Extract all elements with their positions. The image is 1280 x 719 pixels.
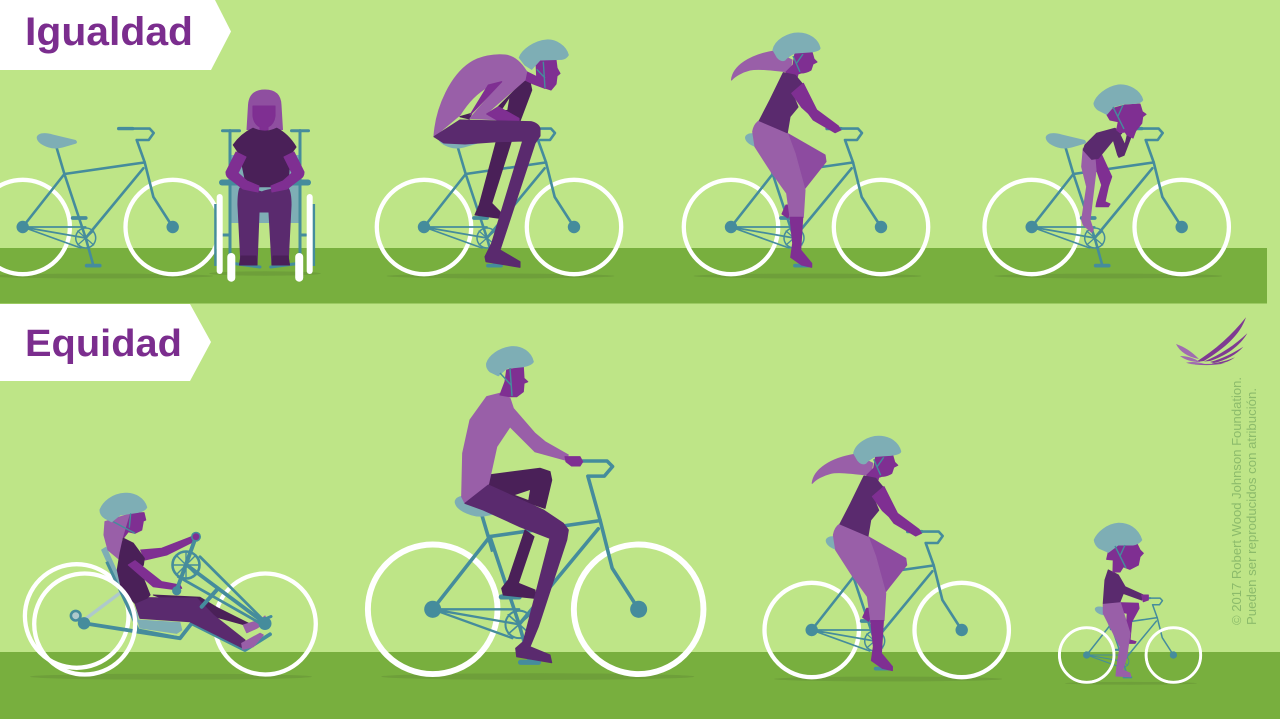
logo: wing — [1176, 317, 1247, 365]
igualdad: tall cyclist on standard bike — [377, 40, 621, 278]
igualdad: woman cyclist on standard bike — [684, 33, 928, 278]
heading: Equidad: Equidad — [25, 323, 182, 365]
equidad: adapted hand-cycle rider — [25, 493, 316, 680]
copyright note: © 2017 Robert Wood Johnson Foundation. — [1230, 377, 1244, 625]
copyright note — [1230, 377, 1259, 625]
ground: igualdad — [0, 248, 1267, 304]
hair — [246, 90, 283, 130]
equidad: child on small bike — [1059, 523, 1201, 685]
hand crank — [172, 537, 271, 625]
equidad: woman cyclist on standard bike — [764, 436, 1009, 681]
igualdad: person in wheelchair — [209, 90, 321, 282]
heading: Igualdad: Igualdad — [25, 10, 193, 54]
equidad: tall cyclist on large bike — [368, 347, 703, 680]
wheelchair — [209, 130, 321, 282]
copyright note: Pueden ser reproducidos con atribución. — [1245, 388, 1259, 625]
igualdad: small child on standard bike — [984, 85, 1229, 278]
igualdad: empty bicycle — [0, 129, 220, 278]
heading: Equidad — [0, 304, 211, 381]
ground: equidad — [0, 652, 1280, 719]
heading: Igualdad — [0, 0, 231, 70]
hand-cycle wheels — [25, 564, 316, 674]
